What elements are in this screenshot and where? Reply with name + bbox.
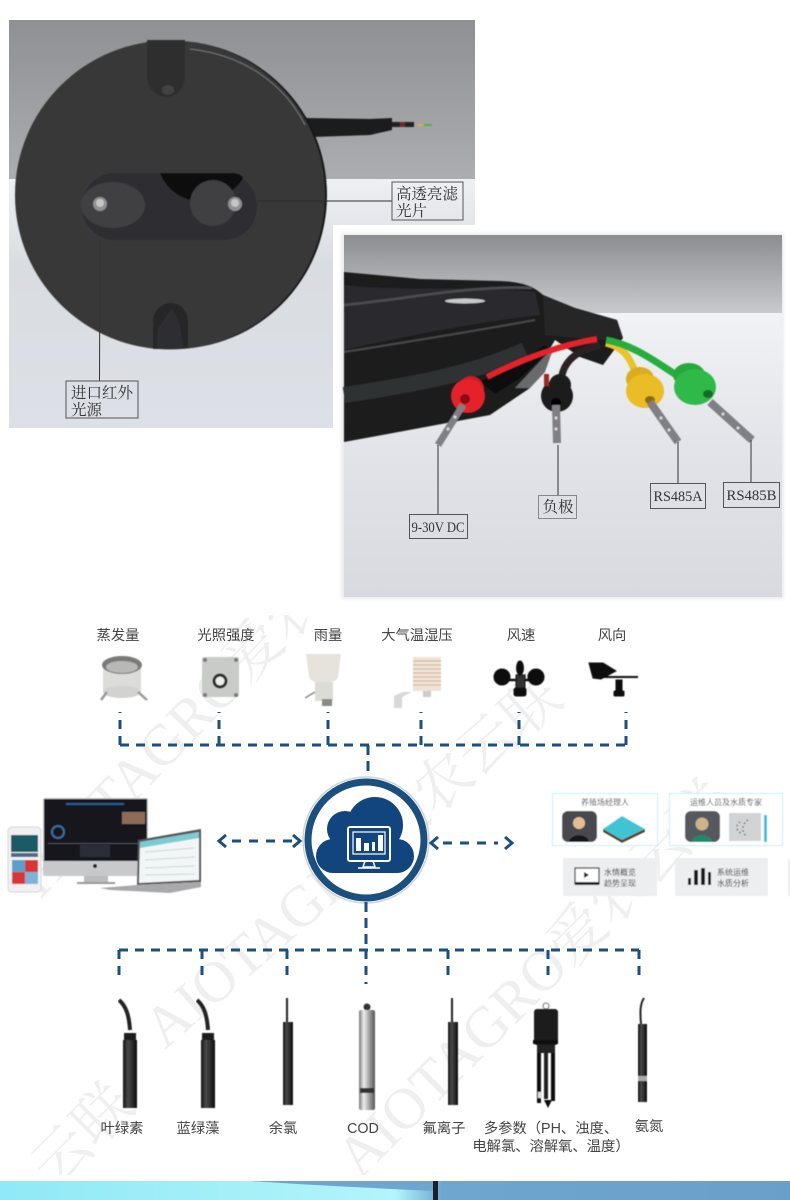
top sensor labels xyxy=(97,627,626,644)
bottom sensor labels: 氟离子 xyxy=(423,1120,465,1137)
tile: water overview xyxy=(563,858,657,896)
card: farm manager: 养殖场经理人 xyxy=(581,797,629,807)
callout: RS485A: RS485A xyxy=(654,489,703,505)
icon: wind vane xyxy=(589,663,638,696)
callout: negative pole xyxy=(538,496,576,518)
top sensor labels: 风速 xyxy=(507,627,535,644)
icon: cloud monitoring hub xyxy=(303,777,429,903)
card: operations and water quality experts xyxy=(670,794,782,846)
top sensor labels: 蒸发量 xyxy=(97,627,139,644)
callout: imported infrared source: 进口红外 xyxy=(71,384,134,402)
callout: RS485B xyxy=(724,482,780,508)
tile: system operations xyxy=(675,858,768,896)
top sensor labels: 光照强度 xyxy=(197,627,255,644)
top sensor labels: 雨量 xyxy=(314,628,342,644)
bottom sensor labels: 蓝绿藻 xyxy=(177,1120,219,1137)
sensor: chlorophyll xyxy=(119,1000,137,1108)
callout: 9-30V DC xyxy=(410,514,468,538)
screws xyxy=(93,197,107,211)
callout: high transmission filter xyxy=(392,182,463,220)
arrow: devices to cloud xyxy=(219,835,300,847)
arrow: cloud to dashboards xyxy=(431,837,512,849)
sensor: multi-parameter xyxy=(533,1003,558,1108)
icon: light intensity box xyxy=(202,657,239,697)
icon: temperature humidity shelter xyxy=(394,657,441,708)
lens slot xyxy=(82,173,257,240)
icon: anemometer xyxy=(494,661,544,696)
bottom sensor labels: 多参数（PH、浊度、 xyxy=(484,1120,618,1137)
callout: RS485B: RS485B xyxy=(726,488,776,504)
bottom sensor labels xyxy=(101,1118,663,1155)
bottom photo band xyxy=(0,1181,790,1200)
callout: high transmission filter: 光片 xyxy=(396,202,427,220)
sensor disc body xyxy=(15,40,327,350)
top sensor labels: 风向 xyxy=(598,627,626,644)
sensor: COD xyxy=(359,1004,375,1110)
card: operations and water quality experts: 运维人员及水质专家 xyxy=(690,797,762,807)
watermark: AIOTAGRO爱农云联 xyxy=(323,768,744,1189)
tile: water overview: 水情概览 xyxy=(604,867,636,877)
tile: system operations: 系统运维 xyxy=(717,867,749,877)
top mounting notch xyxy=(147,40,185,97)
sensor: residual chlorine xyxy=(283,998,293,1105)
watermark: AIOTAGRO爱农云联 xyxy=(131,663,574,1060)
sensor: fluoride ion xyxy=(448,998,458,1105)
bottom sensor labels: COD xyxy=(347,1121,379,1137)
tile: system operations: 水质分析 xyxy=(717,878,749,888)
photo panel: round sensor front xyxy=(9,20,475,428)
sensor: ammonia nitrogen xyxy=(638,998,647,1102)
callout: imported infrared source xyxy=(66,381,138,419)
sensor cable at rear xyxy=(305,118,432,137)
bottom sensor labels: 氨氮 xyxy=(635,1118,663,1135)
callout: negative pole: 负极 xyxy=(542,497,574,516)
sensor: blue-green algae xyxy=(197,1000,215,1108)
callout: 9-30V DC: 9-30V DC xyxy=(412,520,464,536)
connector: lower dashed bus xyxy=(119,902,639,984)
coloured wires and connectors xyxy=(438,339,752,445)
bottom sensor labels: 电解氯、溶解氧、温度） xyxy=(472,1138,630,1155)
laptop xyxy=(100,829,201,893)
card: farm manager xyxy=(552,794,658,846)
panel: user roles and analysis tiles xyxy=(552,794,790,896)
coiled black cable xyxy=(344,272,623,442)
icon: rain gauge xyxy=(305,654,341,706)
watermark: 云联 xyxy=(18,1071,146,1199)
top sensor labels: 大气温湿压 xyxy=(381,627,453,644)
watermark: HIOTAGRO爱农云联 xyxy=(3,482,418,909)
bottom mounting notch xyxy=(153,303,188,349)
callout: RS485A xyxy=(650,484,706,508)
bottom sensor labels: 叶绿素 xyxy=(101,1120,143,1137)
bottom sensor labels: 余氯 xyxy=(269,1119,297,1137)
tile: cut off at right edge xyxy=(788,858,790,896)
callout: high transmission filter: 高透亮滤 xyxy=(396,184,459,203)
connector: upper dashed bus xyxy=(120,712,627,778)
photo panel: cable wiring xyxy=(333,225,790,600)
icon: evaporation pan xyxy=(101,656,147,700)
monitor xyxy=(43,798,148,884)
tile: water overview: 趋势呈现 xyxy=(604,878,636,888)
watermark xyxy=(31,615,720,1175)
callout: imported infrared source: 光源 xyxy=(71,401,103,419)
devices: phone, monitor and laptop xyxy=(8,798,201,893)
phone xyxy=(8,827,41,892)
